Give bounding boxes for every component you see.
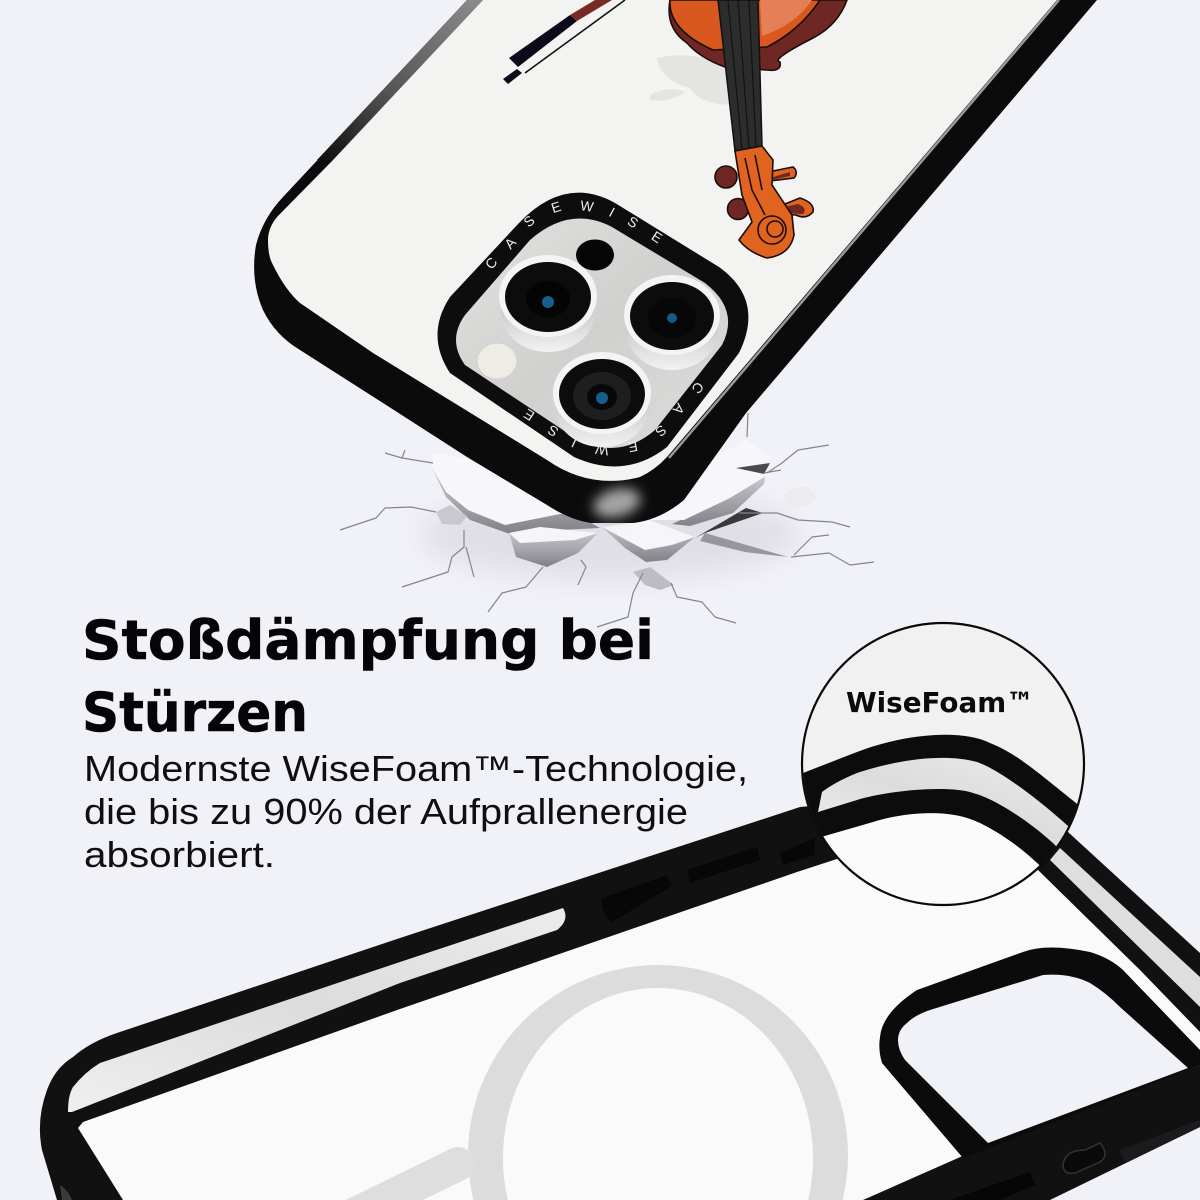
violin illustration [503, 0, 847, 258]
CASEWISE lettering top: I [607, 204, 617, 220]
side buttons [602, 838, 815, 922]
bow [503, 0, 625, 84]
violin scroll [715, 146, 813, 258]
crack lines [340, 413, 874, 627]
magnifier label: WiseFoam™ [846, 686, 1034, 719]
right plate [650, 440, 788, 557]
lens right [624, 275, 720, 370]
cracked ground impact [340, 413, 874, 627]
fingerboard [718, 0, 762, 151]
clear strip left [68, 908, 565, 1112]
lens top left [499, 255, 597, 352]
magnifier fill [802, 623, 1084, 905]
CASEWISE lettering top: W [579, 197, 595, 215]
magsafe pill [346, 1147, 475, 1200]
left plate [431, 453, 610, 534]
shadow of violin [650, 55, 735, 105]
rock chunk left [509, 527, 598, 567]
black frame [40, 790, 1200, 1200]
CASEWISE lettering bottom: C [689, 379, 707, 397]
heading: Stoßdämpfung bei [82, 609, 654, 672]
bumper highlight [590, 483, 644, 523]
heading: Stürzen [82, 681, 308, 744]
CASEWISE lettering bottom: S [652, 422, 670, 440]
CASEWISE lettering bottom: E [627, 438, 639, 456]
body text: absorbiert. [84, 834, 275, 875]
CASEWISE lettering bottom: I [569, 435, 579, 451]
CASEWISE lettering bottom: A [669, 400, 688, 418]
CASEWISE lettering top: A [501, 234, 520, 252]
small rocks [436, 487, 817, 590]
lens bottom [553, 352, 651, 447]
bottom right details [950, 1120, 1200, 1200]
magnified frame corner [803, 734, 1077, 904]
CASEWISE lettering bottom: E [521, 406, 537, 424]
CASEWISE lettering bottom: S [545, 422, 561, 440]
CASEWISE lettering bottom: W [594, 441, 610, 459]
CASEWISE lettering top: S [625, 213, 641, 231]
lidar hole [576, 240, 614, 270]
clear interior [78, 850, 1200, 1200]
body text: die bis zu 90% der Aufprallenergie [84, 791, 688, 832]
phone case top: body [254, 0, 1097, 523]
body text [84, 748, 748, 875]
camera cutout [879, 948, 1200, 1158]
case black bumper [254, 0, 1097, 523]
clear strip right [1050, 848, 1200, 1007]
camera plate [456, 219, 728, 448]
CASEWISE lettering top: E [549, 198, 563, 216]
rock chunk centre [602, 520, 695, 562]
magsafe ring [468, 965, 848, 1200]
flash [477, 343, 517, 379]
phone case bottom: clear case [40, 790, 1200, 1200]
CASEWISE lettering top: C [482, 254, 500, 272]
CASEWISE lettering bottom [521, 379, 707, 459]
bottom left port [60, 1185, 72, 1200]
CASEWISE lettering top: S [520, 212, 538, 230]
magnifier outline [802, 623, 1084, 905]
CASEWISE lettering top: E [649, 228, 665, 246]
camera island bumper [438, 193, 748, 466]
violin body [669, 0, 847, 70]
CASEWISE lettering top [482, 197, 665, 272]
heading [82, 609, 654, 744]
case back panel [268, 0, 1057, 481]
body text: Modernste WiseFoam™-Technologie, [84, 748, 748, 789]
upper edge sheen [317, 0, 483, 160]
panel edge highlight [669, 0, 1059, 458]
